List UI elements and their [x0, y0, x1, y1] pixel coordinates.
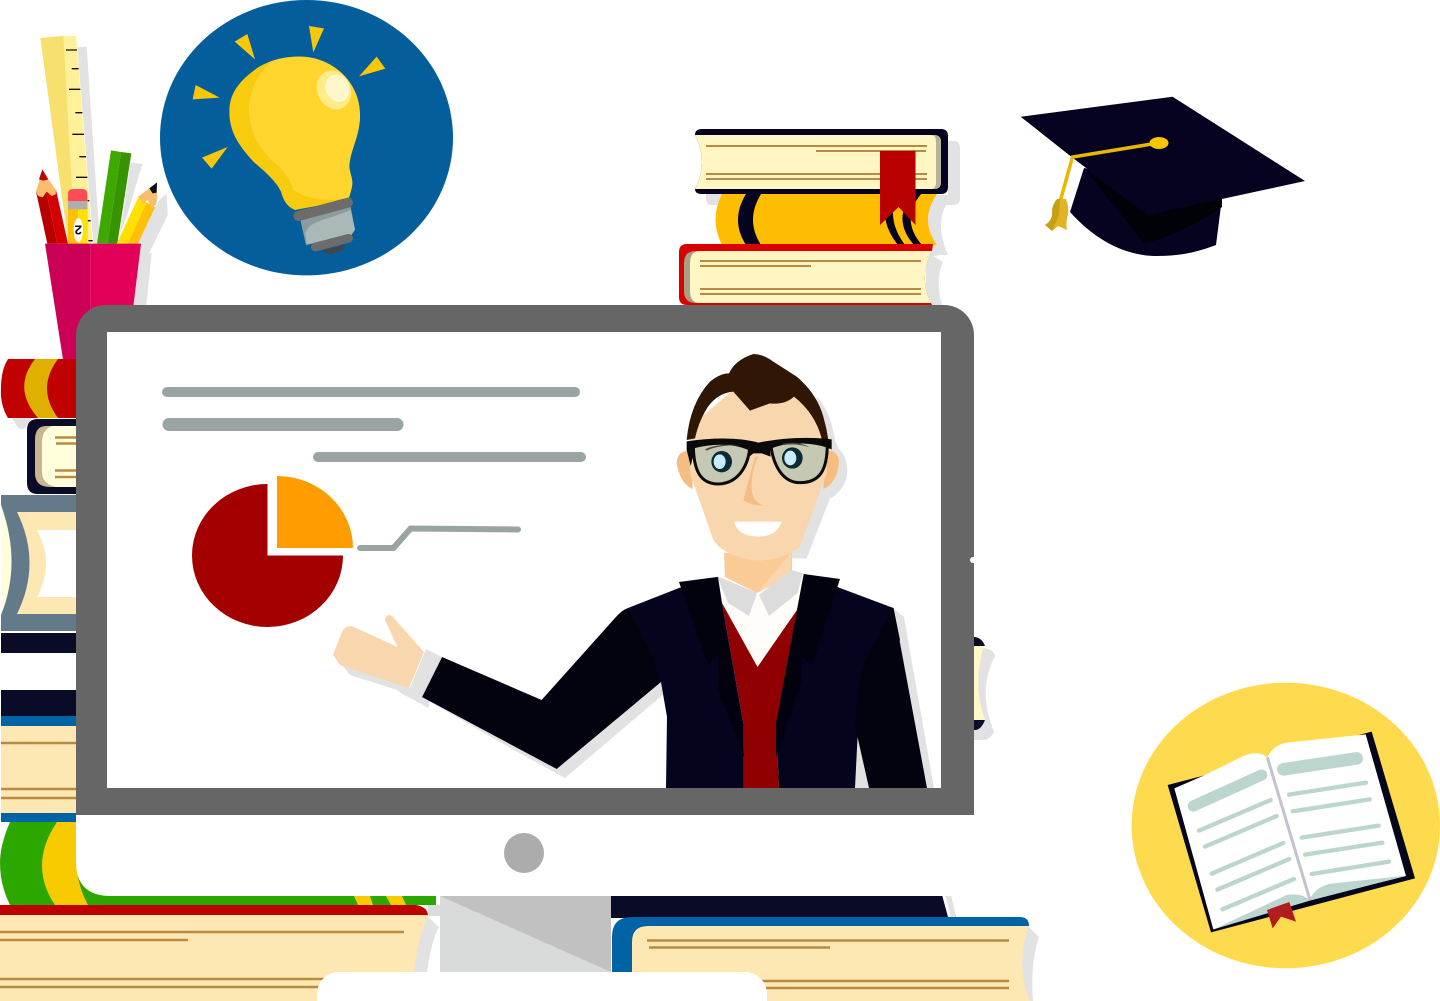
book pile: right of stand [611, 880, 1039, 1001]
neck [724, 553, 792, 593]
jacket sleeves [422, 608, 927, 788]
hair [687, 354, 828, 440]
monitor frame [76, 305, 974, 815]
lapels [679, 574, 840, 757]
book pile: left side [0, 359, 440, 1001]
head [677, 354, 839, 560]
eyes [711, 451, 732, 472]
eraser pencil [68, 189, 88, 244]
small navy book [27, 419, 76, 494]
icon: graduation cap [1021, 97, 1305, 256]
pie chart [192, 476, 353, 627]
blue book [612, 917, 1039, 1001]
light rays [193, 26, 385, 169]
green marker [97, 150, 131, 244]
stack shadows [706, 141, 960, 305]
monitor base [317, 972, 767, 1001]
red book [1, 359, 76, 429]
face [690, 390, 827, 560]
screen [107, 332, 941, 788]
monitor stand [440, 896, 611, 976]
glasses [687, 438, 832, 484]
dark book [611, 880, 956, 918]
icon: blue circle [160, 0, 453, 275]
cup [45, 244, 141, 362]
bottom red book [679, 244, 933, 305]
ruler [40, 36, 93, 244]
bookmark ribbon [880, 151, 916, 225]
eraser pencil: 2 [75, 222, 82, 237]
mouth [734, 522, 782, 537]
icon: open book in yellow circle [1132, 683, 1440, 968]
nose [743, 457, 765, 506]
ears [677, 451, 839, 489]
eyebrows [705, 443, 810, 451]
body shadows [342, 608, 934, 788]
book stack: top centre [679, 129, 960, 305]
power button [504, 833, 544, 873]
monitor chin [76, 815, 974, 896]
slide text lines [167, 392, 581, 457]
slate book [1, 495, 76, 631]
presenter [333, 354, 934, 788]
monitor [76, 305, 976, 1001]
middle yellow book [716, 194, 937, 245]
red pencil [36, 169, 68, 244]
chart callout line [360, 528, 518, 548]
top dark book [695, 129, 948, 194]
head shadow [791, 397, 848, 558]
book peeking behind monitor, right edge [970, 637, 995, 740]
navy strip [1, 633, 76, 653]
navy and blue book [1, 690, 76, 822]
jacket torso [628, 574, 900, 788]
shirt and vest [717, 570, 803, 788]
hand [333, 615, 442, 697]
yellow pencil [117, 182, 157, 244]
icon: pencil cup with ruler and pencils [36, 36, 168, 362]
bottom red book [0, 905, 440, 1001]
icon: light bulb [193, 26, 385, 254]
green book [0, 822, 436, 905]
tassel [1045, 137, 1168, 231]
